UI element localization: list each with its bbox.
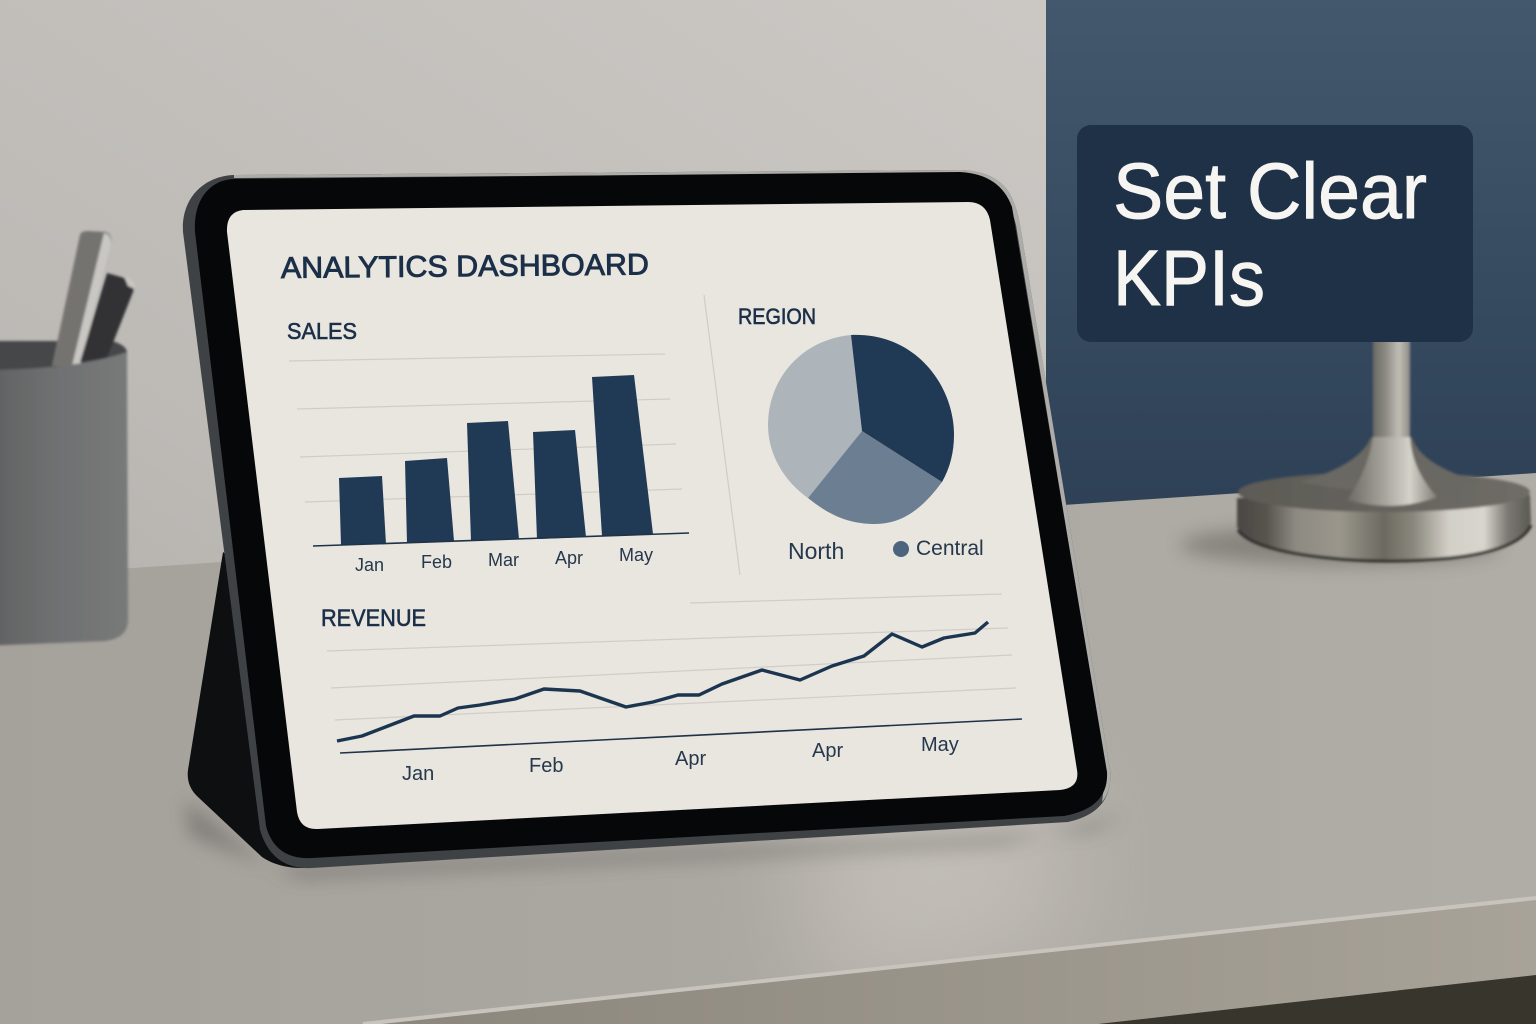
- pens: [52, 231, 135, 366]
- lamp flare: [1347, 437, 1437, 506]
- bar labels: Apr: [555, 548, 583, 568]
- revenue labels: May: [921, 734, 959, 756]
- pie legend: [788, 537, 984, 564]
- revenue labels: Apr: [812, 740, 843, 762]
- pen holder: [0, 231, 135, 646]
- cup interior: [0, 341, 127, 374]
- revenue grid lines: [327, 594, 1016, 720]
- bar chart: [339, 375, 653, 545]
- bar labels: May: [619, 545, 653, 565]
- tablet bezel: [183, 170, 1110, 868]
- navy wall panel: [1046, 0, 1536, 520]
- sales heading: SALES: [287, 318, 357, 344]
- revenue labels: [402, 734, 959, 785]
- pie chart: [768, 335, 954, 524]
- revenue line chart: [337, 622, 988, 741]
- revenue labels: Jan: [402, 763, 434, 785]
- revenue labels: Apr: [675, 748, 706, 770]
- lamp base: [1237, 340, 1531, 561]
- desk light patch: [800, 760, 1070, 1000]
- desk surface: [0, 473, 1536, 1024]
- callout heading: Set Clear: [1113, 146, 1427, 235]
- bar labels: Mar: [488, 550, 519, 570]
- desk front edge: [363, 898, 1536, 1024]
- region heading: REGION: [738, 304, 816, 329]
- revenue labels: Feb: [529, 755, 563, 777]
- dashboard title: ANALYTICS DASHBOARD: [281, 248, 649, 285]
- pie legend: North: [788, 538, 844, 564]
- divider: [704, 295, 740, 575]
- lamp stem: [1373, 340, 1410, 440]
- tablet shadow: [185, 800, 1125, 878]
- revenue axis: [340, 719, 1022, 753]
- callout: [1077, 125, 1473, 342]
- lamp shadow: [1180, 525, 1500, 565]
- bar labels: Feb: [421, 552, 452, 572]
- bar axis: [313, 533, 689, 546]
- lamp cone shadow: [1300, 437, 1480, 491]
- revenue heading: REVENUE: [321, 605, 426, 632]
- bar labels: Jan: [355, 555, 384, 575]
- lamp foot: [1237, 495, 1531, 560]
- cup: [0, 352, 128, 646]
- tablet stand: [188, 552, 400, 868]
- pie legend: Central: [916, 537, 984, 560]
- bar labels: [355, 545, 653, 575]
- tablet screen: [227, 202, 1077, 829]
- sales grid lines: [289, 354, 682, 502]
- callout heading: KPIs: [1113, 233, 1265, 322]
